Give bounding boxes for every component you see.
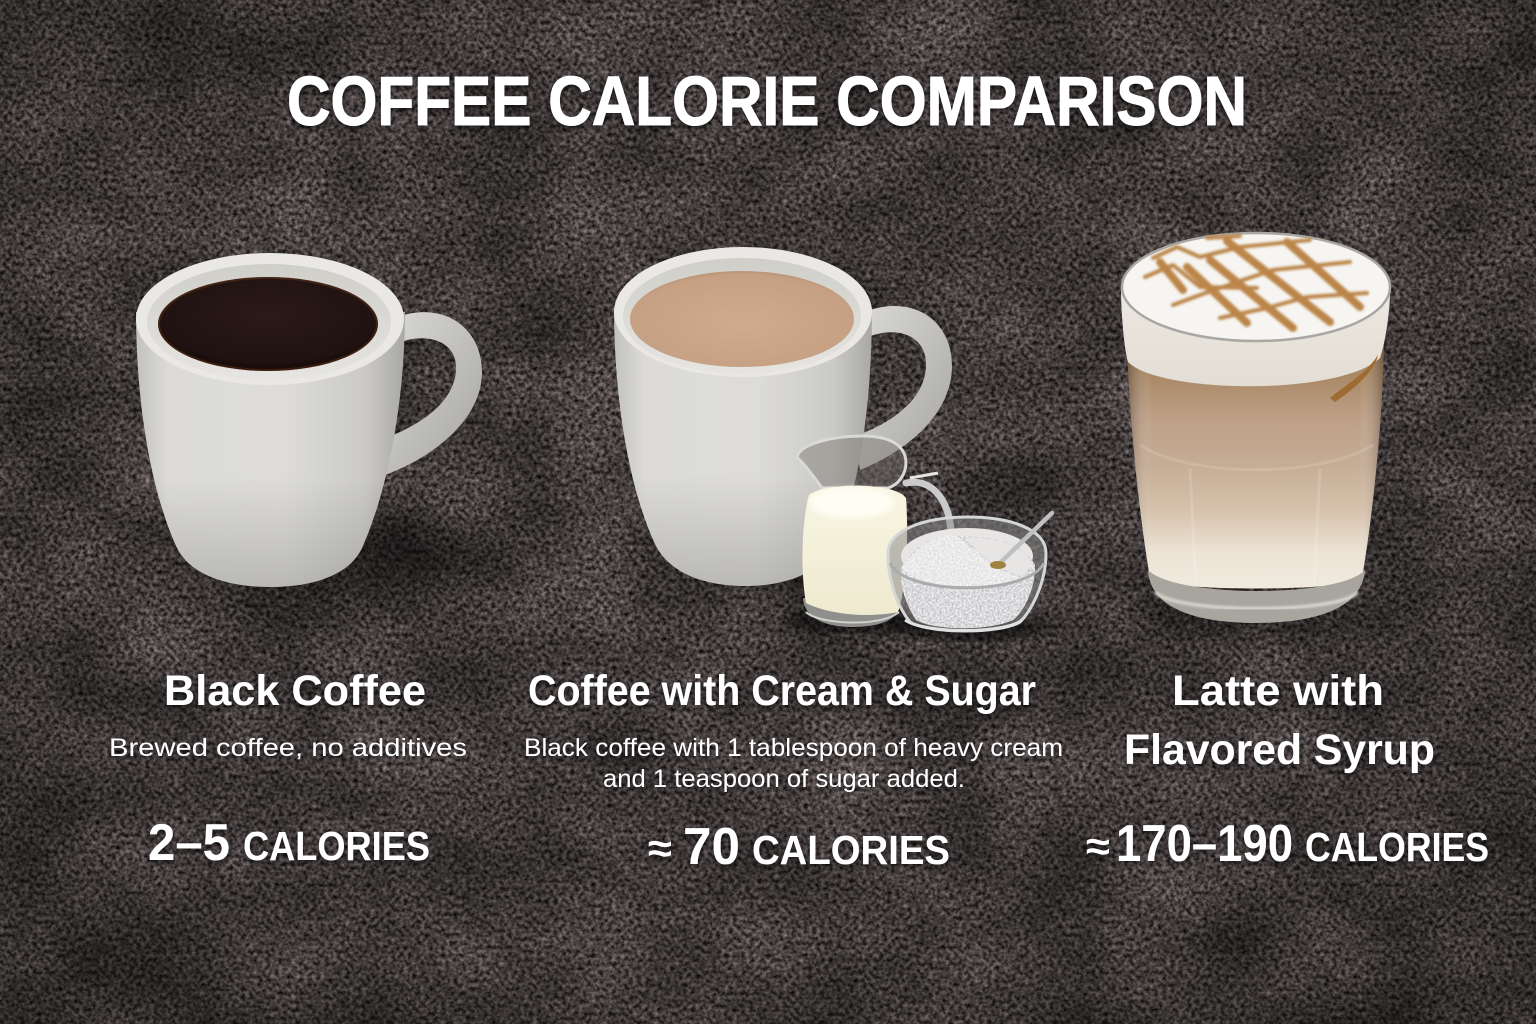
bowl front rim	[890, 563, 1044, 588]
mug handle	[855, 306, 952, 470]
title: COFFEE CALORIE COMPARISON	[287, 62, 1247, 140]
caramel drizzle	[1145, 236, 1367, 328]
column: black coffee text	[109, 667, 467, 872]
calories: cream and sugar: ≈	[648, 827, 672, 871]
black coffee surface	[158, 277, 378, 371]
description: cream and sugar: and 1 teaspoon of sugar added.	[603, 765, 965, 793]
description: cream and sugar	[524, 734, 1063, 793]
calories: cream and sugar: 70	[683, 818, 740, 876]
illustration: coffee with cream mug	[614, 247, 980, 592]
foam top	[1122, 233, 1390, 341]
calories: black coffee	[148, 814, 430, 872]
mug rim	[614, 247, 872, 377]
illustration: milk pitcher	[788, 436, 951, 632]
column: cream and sugar text	[524, 667, 1063, 876]
heading: latte	[1124, 667, 1435, 774]
foam side	[1121, 290, 1390, 386]
column: latte text	[1086, 667, 1489, 873]
pitcher base	[803, 598, 900, 627]
glass facets	[1140, 445, 1373, 590]
sugar body	[901, 536, 1036, 628]
creamy coffee surface	[630, 271, 854, 367]
description: black coffee: Brewed coffee, no additives	[109, 734, 467, 762]
pitcher handle	[906, 482, 951, 530]
calories: black coffee: CALORIES	[243, 823, 430, 869]
spoon	[1001, 513, 1052, 562]
heading: cream and sugar: Coffee with Cream & Sugar	[528, 667, 1036, 715]
description: cream and sugar: Black coffee with 1 tablespoon of heavy cream	[524, 734, 1063, 762]
mug handle	[380, 312, 482, 475]
inner back of bowl	[901, 528, 1033, 584]
heading: latte: Flavored Syrup	[1124, 726, 1435, 774]
illustration: black coffee mug	[136, 253, 515, 594]
calories: latte	[1086, 815, 1489, 873]
calories: latte: CALORIES	[1305, 824, 1489, 870]
milk	[802, 486, 907, 615]
bowl glass	[888, 517, 1046, 631]
mug rim	[136, 253, 404, 385]
pitcher glass top	[797, 436, 906, 488]
latte body	[1127, 345, 1384, 588]
mug body	[136, 312, 405, 587]
sugar mound	[901, 535, 1022, 586]
inner back highlight	[965, 537, 1033, 576]
calories: latte: ≈	[1086, 825, 1110, 869]
calories: cream and sugar: CALORIES	[752, 827, 950, 873]
mug body	[614, 308, 872, 586]
heading: latte: Latte with	[1172, 667, 1384, 715]
heading: black coffee: Black Coffee	[164, 667, 426, 715]
illustration: latte glass	[1121, 233, 1392, 632]
caramel streak	[1330, 355, 1378, 402]
calories: black coffee: 2–5	[148, 814, 230, 872]
calories: latte: 170–190	[1116, 815, 1293, 873]
calories: cream and sugar	[648, 818, 950, 876]
milk surface	[810, 488, 894, 518]
illustration: sugar bowl	[888, 513, 1054, 640]
glass base	[1148, 570, 1365, 623]
